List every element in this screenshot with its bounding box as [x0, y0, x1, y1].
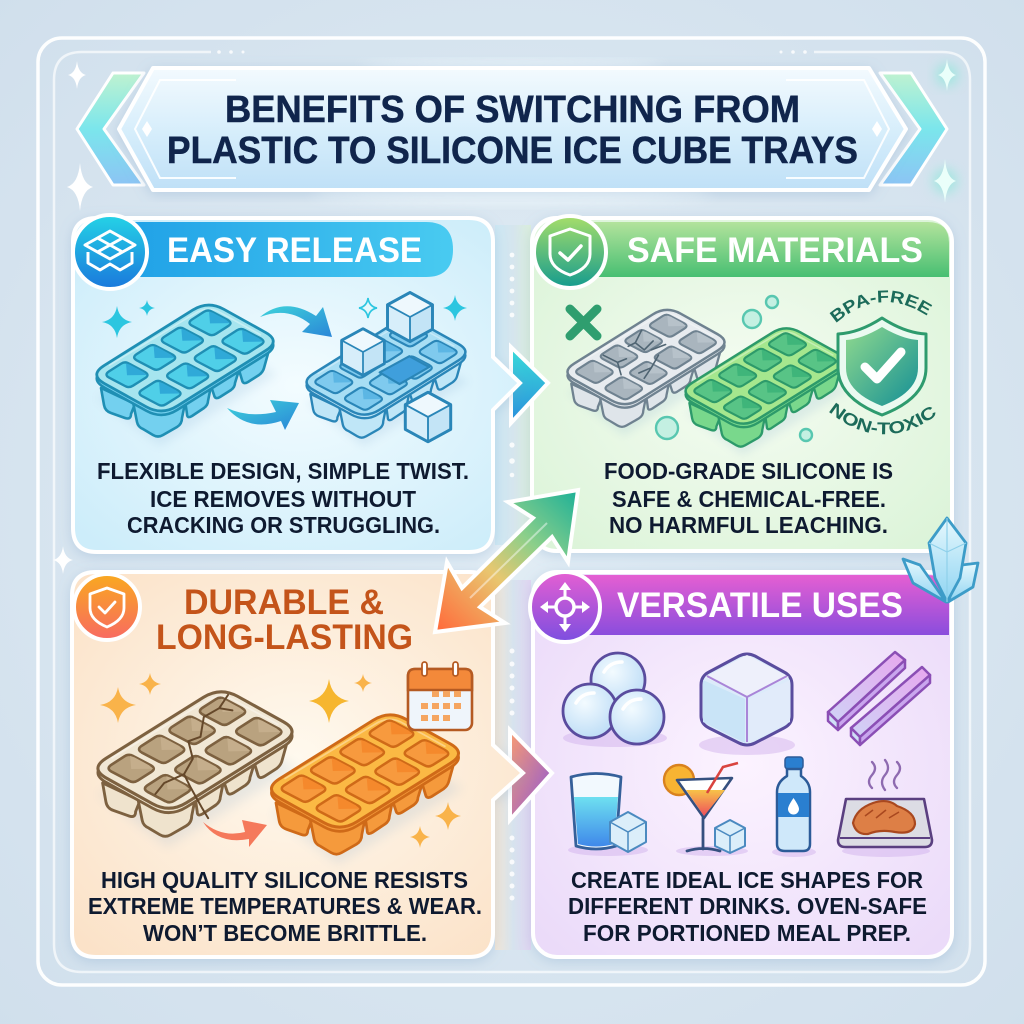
- heading: SAFE MATERIALS: [627, 231, 923, 270]
- body text: DIFFERENT DRINKS. OVEN-SAFE: [568, 893, 927, 919]
- heading: LONG-LASTING: [156, 618, 413, 657]
- sparkles around frame: [53, 59, 958, 574]
- icon: x mark: [570, 309, 597, 336]
- panel: versatile uses: [530, 572, 952, 957]
- icon: bpa-free shield: [838, 318, 926, 415]
- right chevron: [880, 73, 947, 185]
- header band: [565, 575, 949, 635]
- body text: FOOD-GRADE SILICONE IS: [604, 458, 893, 484]
- body text: HIGH QUALITY SILICONE RESISTS: [101, 867, 468, 893]
- title text: [167, 89, 858, 172]
- body text: [604, 458, 893, 538]
- icon: shield badge: [534, 216, 606, 288]
- body text: [568, 867, 927, 946]
- body text: [88, 867, 482, 946]
- cracks: [603, 330, 666, 378]
- arrow: tray to ice top: [260, 306, 332, 337]
- water bottle: [772, 757, 816, 857]
- arrow: tray to ice bottom: [227, 400, 299, 430]
- body text: ICE REMOVES WITHOUT: [150, 486, 416, 512]
- silicone green tray: [686, 328, 848, 455]
- cracks: [155, 695, 232, 818]
- body text: WON’T BECOME BRITTLE.: [143, 920, 427, 946]
- worn plastic tray: [98, 692, 296, 847]
- heading: [156, 583, 413, 657]
- sparkles: [100, 673, 461, 848]
- arrow: easy release to safe materials: [511, 347, 548, 423]
- body text: CRACKING OR STRUGGLING.: [127, 512, 440, 538]
- large ice cube: [699, 654, 795, 755]
- ice spheres: [563, 653, 667, 747]
- sparkles: [102, 295, 467, 338]
- icon: calendar: [408, 662, 472, 730]
- new orange tray: [271, 715, 463, 864]
- icon: arrows badge: [530, 572, 600, 642]
- heading: DURABLE &: [184, 583, 384, 622]
- full ice tray: [97, 305, 277, 446]
- body text: CREATE IDEAL ICE SHAPES FOR: [571, 867, 923, 893]
- bubbles: [656, 296, 812, 441]
- title banner: [77, 68, 947, 190]
- badge label arcs: BPA-FREE: [830, 290, 932, 322]
- ice cube middle: [342, 329, 384, 375]
- body text: [97, 458, 469, 538]
- body text: FLEXIBLE DESIGN, SIMPLE TWIST.: [97, 458, 469, 484]
- heading: EASY RELEASE: [167, 231, 422, 270]
- released tray: [307, 319, 469, 446]
- ice sticks: [828, 652, 930, 745]
- body text: NO HARMFUL LEACHING.: [609, 512, 888, 538]
- plastic cracked tray: [567, 310, 728, 435]
- icon: shield badge: [74, 574, 140, 640]
- header pill: [110, 222, 453, 277]
- baked portion on tray: [838, 760, 932, 857]
- panel: safe materials: [526, 214, 958, 560]
- body text: FOR PORTIONED MEAL PREP.: [583, 920, 911, 946]
- title text: BENEFITS OF SWITCHING FROM: [225, 89, 800, 131]
- badge label arcs: [829, 290, 936, 434]
- icon: ice crystal: [903, 518, 978, 602]
- icon: tray badge: [73, 215, 147, 289]
- arrow: durable to versatile: [510, 730, 552, 820]
- arrow: worn to new: [203, 820, 267, 847]
- left chevron: [77, 73, 144, 185]
- cocktail glass with cube: [664, 763, 748, 856]
- panel: durable and long-lasting: [72, 572, 523, 957]
- body text: SAFE & CHEMICAL-FREE.: [612, 486, 886, 512]
- water glass with cube: [568, 774, 648, 856]
- body text: EXTREME TEMPERATURES & WEAR.: [88, 893, 482, 919]
- title text: PLASTIC TO SILICONE ICE CUBE TRAYS: [167, 130, 858, 172]
- ice cube top: [388, 293, 432, 341]
- heading: VERSATILE USES: [617, 586, 903, 625]
- badge label arcs: NON-TOXIC: [829, 402, 936, 434]
- ice cube bottom: [405, 392, 451, 442]
- header band: [570, 222, 949, 277]
- panel: easy release: [73, 215, 520, 552]
- banner plate: [119, 68, 906, 190]
- arrow: two-way diagonal: [435, 490, 578, 632]
